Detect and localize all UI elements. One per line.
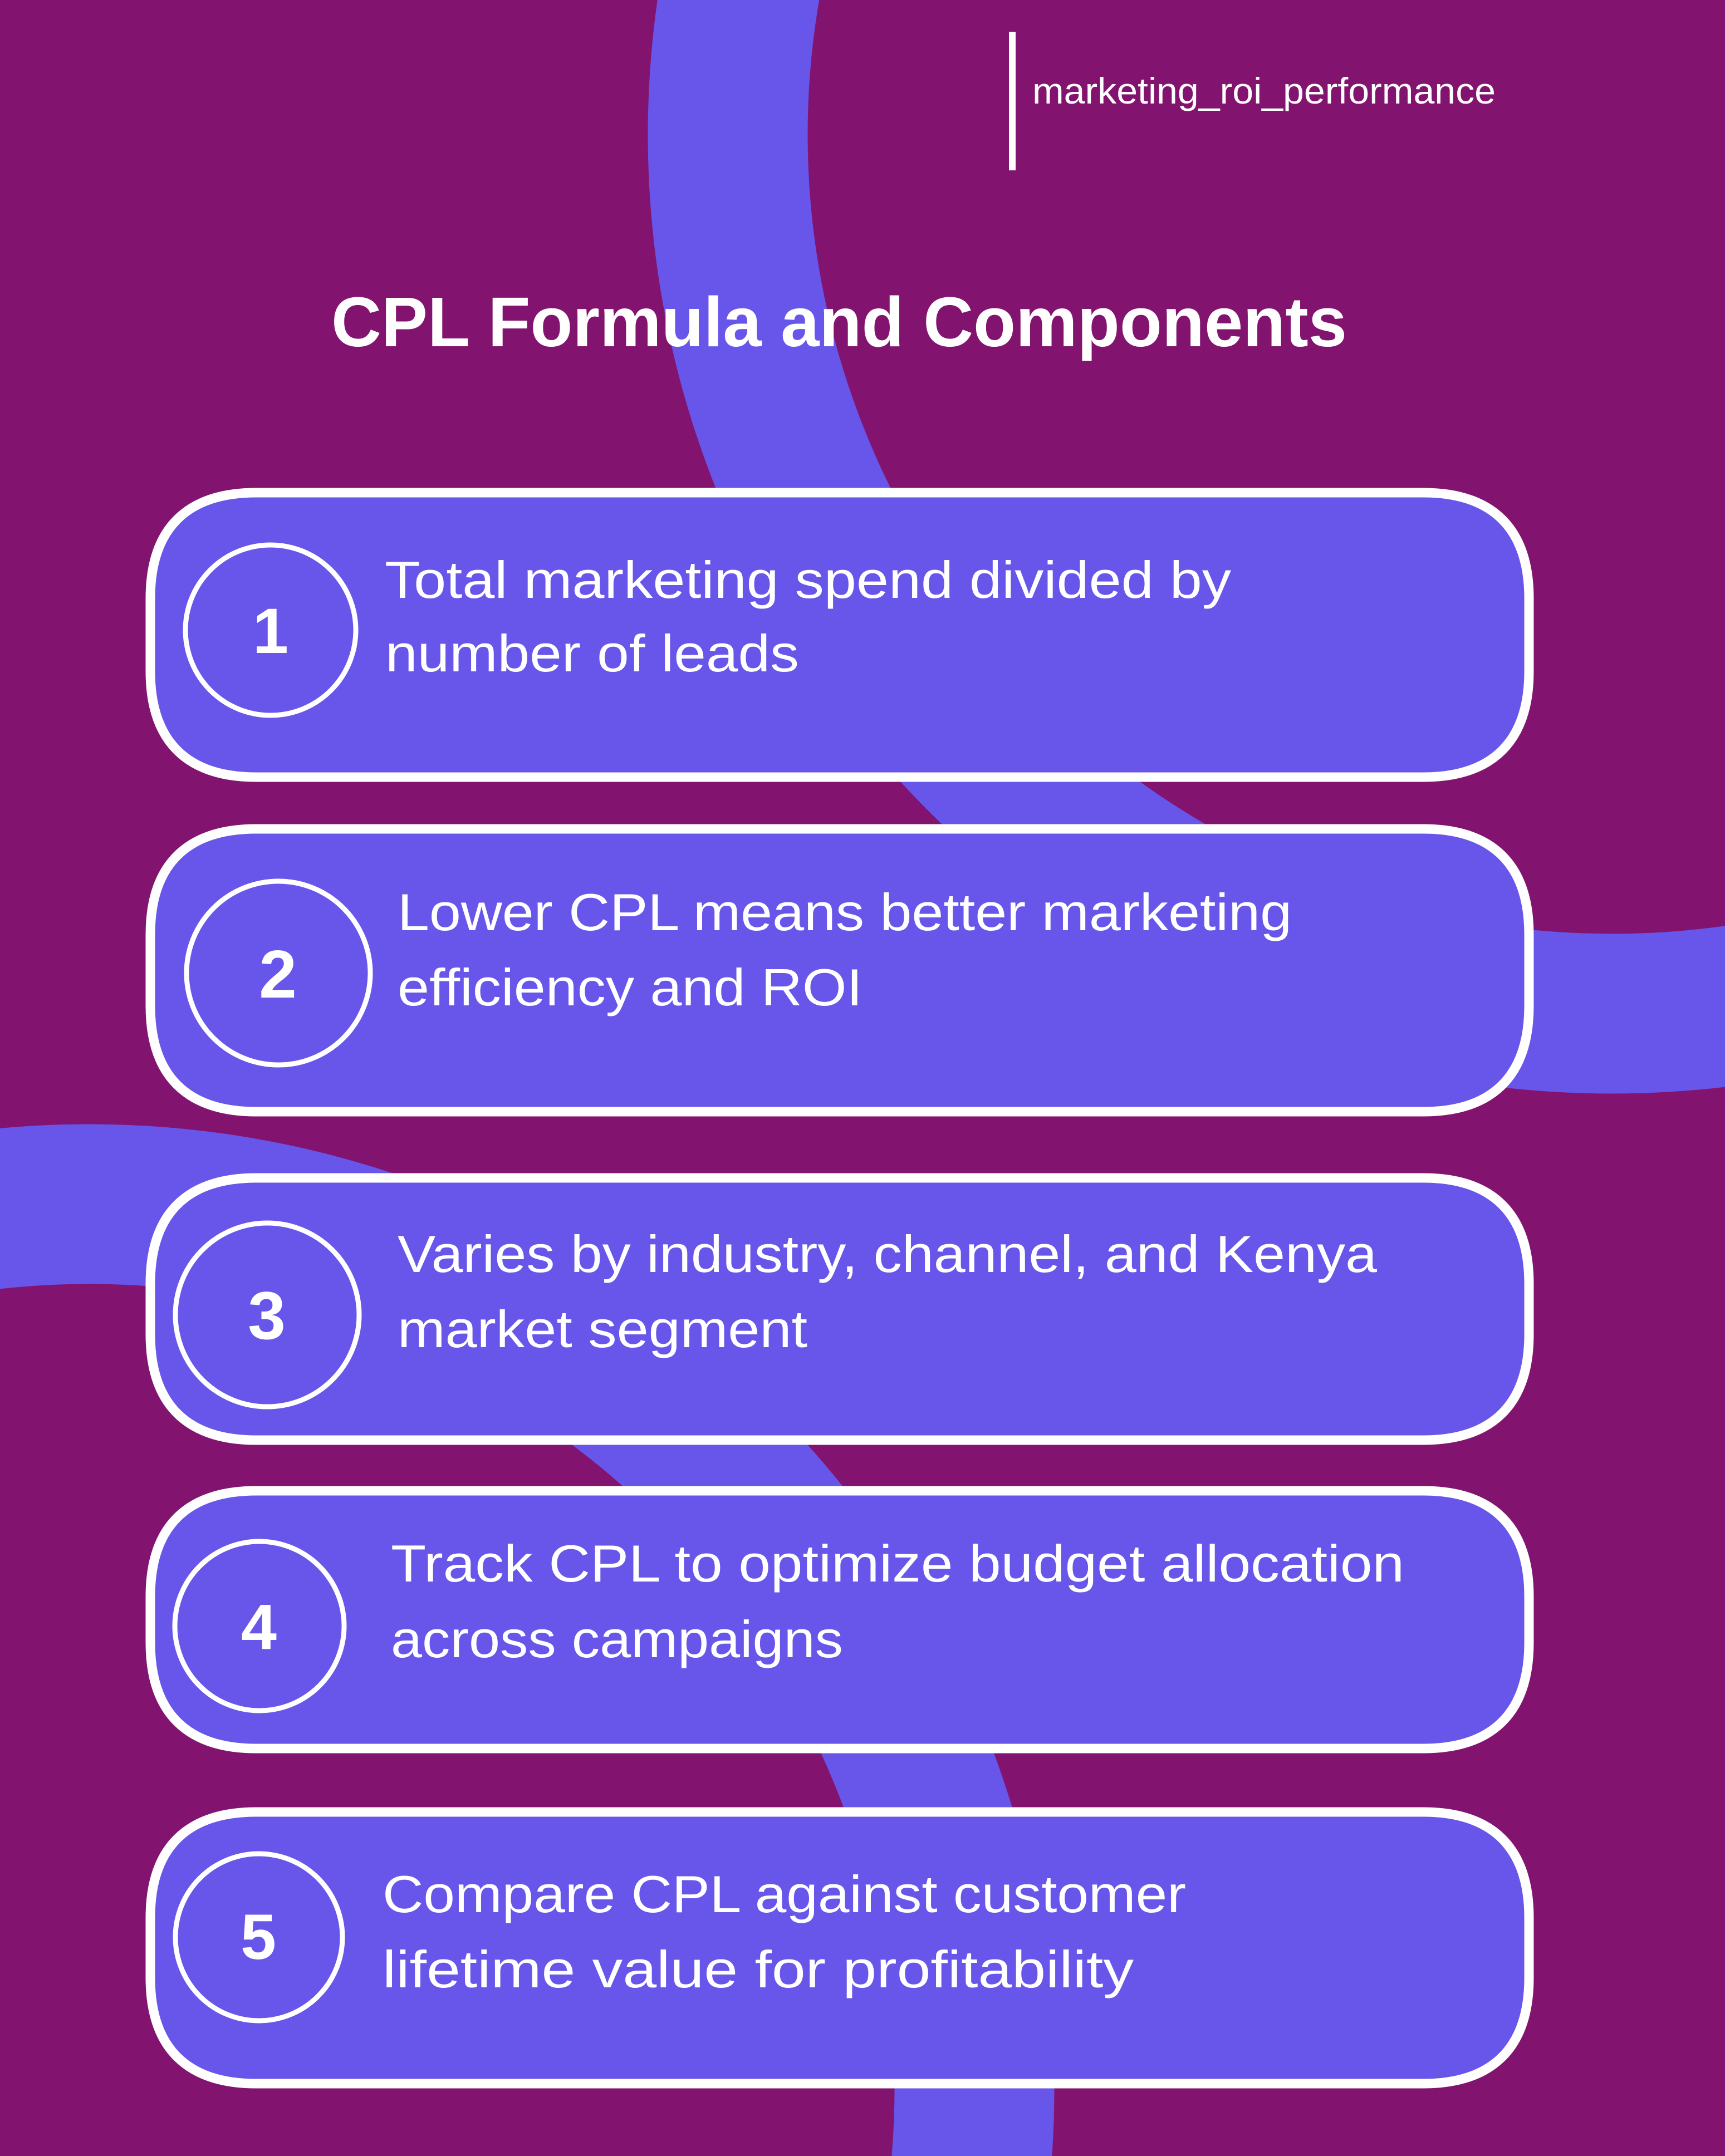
decorative ribbon: upper arc <box>648 0 1725 1093</box>
text: item 5 <box>383 1865 1186 1998</box>
text: item 3: Varies by industry, channel, and Kenya <box>398 1225 1378 1283</box>
number badge 5: 5 <box>241 1902 276 1973</box>
number badge 4 <box>175 1541 344 1711</box>
title: CPL Formula and Components <box>331 283 1347 361</box>
number badge 2 <box>187 881 370 1065</box>
text: item 2: efficiency and ROI <box>398 958 862 1016</box>
text: item 1: Total marketing spend divided by <box>385 551 1231 609</box>
text: item 2: Lower CPL means better marketing <box>398 883 1292 941</box>
text: item 4: across campaigns <box>391 1610 843 1668</box>
text: item 4: Track CPL to optimize budget allocation <box>391 1534 1404 1593</box>
header tag <box>1009 32 1496 170</box>
number badge 2: 2 <box>259 936 297 1012</box>
decorative ribbon: lower arc <box>0 1124 1054 2156</box>
text: item 5: Compare CPL against customer <box>383 1865 1186 1923</box>
text: item 2 <box>398 883 1292 1016</box>
panel: item 2 <box>150 829 1529 1112</box>
number badge 4: 4 <box>241 1592 277 1663</box>
text: item 4 <box>391 1534 1404 1668</box>
panel: item 3 <box>150 1178 1529 1440</box>
panel: item 1 <box>150 493 1529 777</box>
text: item 5: lifetime value for profitability <box>383 1940 1134 1998</box>
text: item 1: number of leads <box>385 624 799 682</box>
number badge 5 <box>175 1854 342 2021</box>
panel: item 5 <box>150 1812 1529 2084</box>
text: item 3: market segment <box>398 1300 807 1358</box>
number badge 3: 3 <box>248 1278 286 1353</box>
number badge 1 <box>185 545 356 715</box>
panel: item 4 <box>150 1491 1529 1749</box>
number badge 3 <box>175 1223 359 1407</box>
number badge 1: 1 <box>253 596 288 667</box>
text: item 3 <box>398 1225 1378 1358</box>
header tag: marketing_roi_performance <box>1032 70 1496 111</box>
text: item 1 <box>385 551 1231 682</box>
